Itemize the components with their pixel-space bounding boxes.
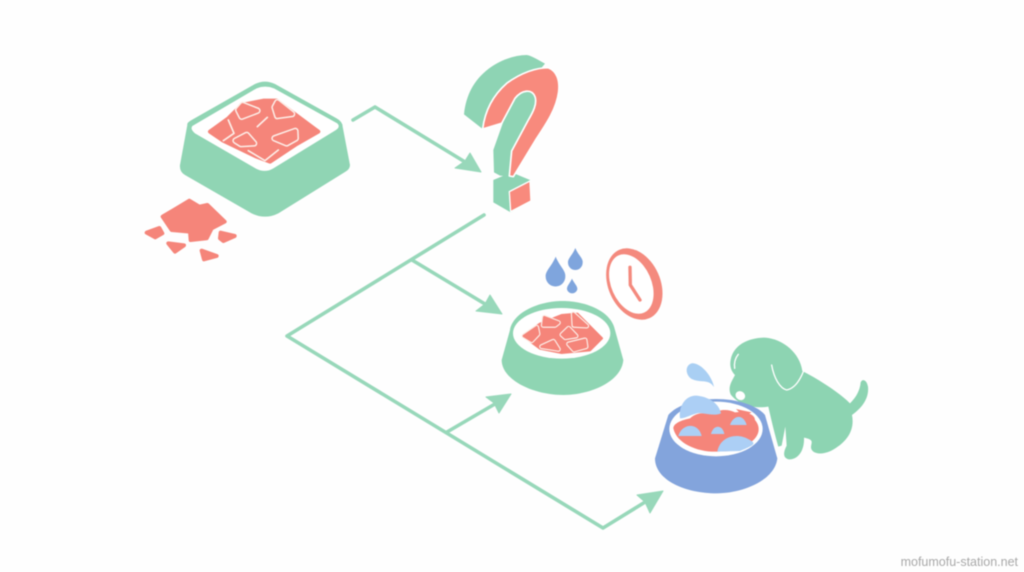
icon: square tray of dry food [180,82,350,217]
icon: loose kibble pile [147,201,235,259]
icon: clock [595,239,673,329]
icon: blue bowl with mixed food [655,396,777,493]
icon: water drops [546,248,583,293]
watermark: mofumofu-station.net [901,555,1019,569]
icon: green bowl with soaked food [502,301,623,395]
icon: puppy [730,338,868,459]
arrow: tray to question mark [353,107,481,172]
icon: water splash [687,363,714,387]
arrow: question mark branching to soaked bowl and mixed bowl [287,215,663,528]
icon: question mark [464,55,559,212]
